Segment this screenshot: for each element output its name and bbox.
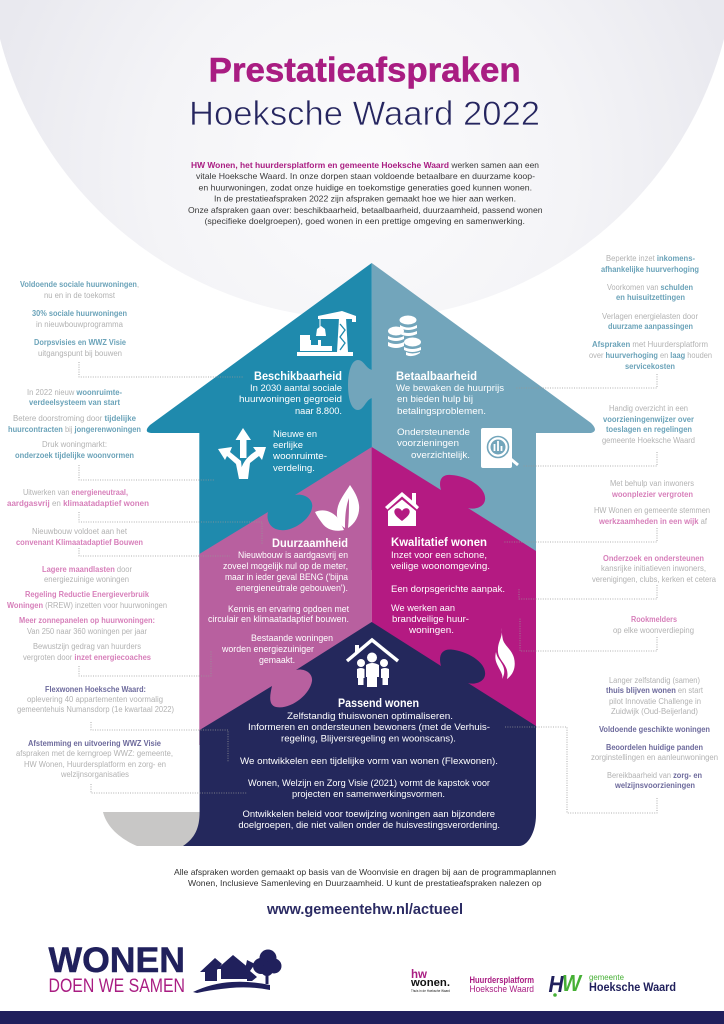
title: [189, 52, 540, 133]
side notes: woonruimteverdeling left: verdeelsysteem van start: [29, 398, 120, 407]
title: Prestatieafspraken: [209, 52, 521, 90]
side notes: beschikbaarheid left: 30% sociale huurwoningen: [32, 309, 127, 318]
panel: passend wonen background: [183, 622, 536, 846]
side notes: kwalitatief wonen right: HW Wonen en gemeente stemmen: [594, 506, 710, 515]
text block: beschikbaarheid: In 2030 aantal sociale: [250, 383, 342, 394]
text block: voorzieningen: Ondersteunende: [397, 427, 470, 438]
text block: beschikbaarheid: huurwoningen gegroeid: [239, 394, 342, 405]
logo: wonen doen we samen: DOEN WE SAMEN: [48, 976, 185, 997]
panel: beschikbaarheid background: [147, 263, 372, 570]
text block: kwalitatief wonen: Een dorpsgerichte aanpak.: [391, 584, 505, 595]
icon: diverging arrows: [218, 428, 266, 479]
logo: wonen doen we samen: [48, 941, 282, 997]
text block: beschikbaarheid: [239, 371, 342, 417]
side notes: woonruimteverdeling left: Druk woningmarkt:: [42, 440, 107, 449]
side notes: betaalbaarheid right: duurzame aanpassingen: [608, 322, 693, 331]
text block: duurzaamheid: [208, 538, 349, 666]
text block: passend wonen: doelgroepen, die niet vallen onder de huisvestingsverordening.: [238, 820, 500, 831]
side notes: duurzaamheid left: Nieuwbouw voldoet aan het: [32, 527, 128, 536]
side notes: duurzaamheid left: vergroten door inzet energiecoaches: [23, 653, 152, 662]
text block: duurzaamheid: maar in ieder geval BENG ('bijna: [225, 572, 349, 583]
panel: kwalitatief wonen background: [372, 447, 536, 745]
text block: kwalitatief wonen: [391, 537, 505, 636]
side notes: passend wonen left: Afstemming en uitvoering WWZ Visie: [28, 739, 162, 748]
icon: flame: [495, 628, 515, 679]
footer text: Alle afspraken worden gemaakt op basis van de Woonvisie en dragen bij aan de programmaplannen: [174, 867, 556, 877]
text block: beschikbaarheid: naar 8.800.: [295, 406, 342, 417]
side notes: woonruimteverdeling left: In 2022 nieuw woonruimte-: [27, 388, 122, 397]
website link: www.gemeentehw.nl/actueel: [266, 901, 463, 918]
side notes: betaalbaarheid right: Afspraken met Huurdersplatform: [592, 340, 708, 349]
intro text: Onze afspraken gaan over: beschikbaarheid, betaalbaarheid, duurzaamheid, passend wonen: [188, 205, 543, 215]
text block: duurzaamheid: worden energiezuiniger: [221, 644, 314, 655]
text block: woonruimteverdeling: eerlijke: [273, 440, 303, 451]
side notes: betaalbaarheid right: Verlagen energielasten door: [602, 312, 698, 321]
side notes: betaalbaarheid right: Handig overzicht in een: [609, 404, 688, 413]
logo: hw wonen: [410, 967, 450, 993]
text block: woonruimteverdeling: [272, 429, 327, 474]
side notes: passend wonen right: Beoordelen huidige panden: [606, 743, 703, 752]
logo: houses and tree: [193, 950, 282, 993]
side notes: passend wonen right: Langer zelfstandig (samen): [609, 676, 700, 685]
text block: passend wonen: Ontwikkelen beleid voor toewijzing woningen aan bijzondere: [242, 809, 495, 820]
text block: woonruimteverdeling: verdeling.: [273, 463, 315, 474]
text block: duurzaamheid: gemaakt.: [259, 655, 295, 666]
text block: kwalitatief wonen: woningen.: [408, 625, 454, 636]
logo: gemeente hoeksche waard: W: [562, 970, 583, 996]
side notes: beschikbaarheid left: [20, 280, 139, 358]
logo: gemeente hoeksche waard: [548, 970, 676, 997]
logo: gemeente hoeksche waard: gemeente: [589, 973, 625, 982]
intro text: In de prestatieafspraken 2022 zijn afspraken gemaakt hoe we hier aan werken.: [214, 194, 516, 204]
side notes: duurzaamheid left: Meer zonnepanelen op huurwoningen:: [19, 616, 155, 625]
side notes: duurzaamheid left: [7, 488, 167, 662]
side notes: duurzaamheid left: Van 250 naar 360 woningen per jaar: [27, 627, 147, 636]
side notes: duurzaamheid left: Bewustzijn gedrag van huurders: [33, 642, 141, 651]
text block: passend wonen: Passend wonen: [338, 698, 419, 710]
side notes: beschikbaarheid left: uitgangspunt bij bouwen: [38, 349, 122, 358]
text block: passend wonen: [238, 698, 500, 831]
side notes: duurzaamheid left: Uitwerken van energieneutraal,: [23, 488, 128, 497]
side notes: passend wonen left: [16, 685, 174, 779]
side notes: passend wonen right: thuis blijven wonen en start: [606, 686, 704, 695]
logo: wonen doen we samen: WONEN: [48, 941, 185, 980]
logo: huurdersplatform: Hoeksche Waard: [470, 984, 534, 994]
icon: report with magnifier: [481, 428, 518, 468]
text block: kwalitatief wonen: We werken aan: [391, 603, 455, 614]
side notes: passend wonen right: zorginstellingen en aanleunwoningen: [591, 753, 718, 762]
intro text: vitale Hoeksche Waard. In onze dorpen staan voldoende betaalbare en duurzame koop-: [196, 171, 535, 181]
side notes: passend wonen right: Bereikbaarheid van zorg- en: [607, 771, 702, 780]
text block: kwalitatief wonen: Inzet voor een schone,: [391, 550, 487, 561]
text block: duurzaamheid: circulair en klimaatadaptief bouwen.: [208, 614, 349, 625]
puzzle knob: betaalbaarheid into beschikbaarheid: [348, 360, 372, 410]
side notes: betaalbaarheid right: Beperkte inzet inkomens-: [606, 254, 695, 263]
text block: passend wonen: Zelfstandig thuiswonen optimaliseren.: [287, 711, 453, 722]
text block: betaalbaarheid: betalingsproblemen.: [397, 406, 486, 417]
logo: huurdersplatform: Huurdersplatform: [470, 975, 534, 985]
icon: crane: [297, 311, 356, 356]
text block: voorzieningen: overzichtelijk.: [411, 450, 470, 461]
text block: kwalitatief wonen: brandveilige huur-: [392, 614, 469, 625]
intro text: en huurwoningen, zodat onze huidige en toekomstige generaties goed kunnen wonen.: [198, 182, 532, 192]
side notes: betaalbaarheid right: [589, 254, 712, 445]
side notes: betaalbaarheid right: gemeente Hoeksche Waard: [602, 436, 695, 445]
side notes: kwalitatief wonen right: [592, 479, 717, 635]
text block: kwalitatief wonen: veilige woonomgeving.: [391, 561, 490, 572]
side notes: duurzaamheid left: Lagere maandlasten door: [42, 565, 132, 574]
side notes: passend wonen right: [591, 676, 718, 790]
logo: hw wonen: hw: [411, 967, 428, 981]
side notes: duurzaamheid left: energiezuinige woningen: [44, 575, 129, 584]
text block: passend wonen: projecten en samenwerkingsvormen.: [292, 789, 445, 800]
side notes: kwalitatief wonen right: Rookmelders: [631, 615, 677, 624]
side notes: beschikbaarheid left: Dorpsvisies en WWZ Visie: [34, 338, 127, 347]
text block: voorzieningen: [397, 427, 470, 461]
side notes: duurzaamheid left: convenant Klimaatadaptief Bouwen: [16, 538, 143, 547]
footer bar: [0, 1011, 724, 1024]
footer text: Wonen, Inclusieve Samenleving en Duurzaamheid. U kunt de prestatieafspraken nalezen op: [188, 878, 542, 888]
text block: woonruimteverdeling: woonruimte-: [272, 451, 327, 462]
text block: betaalbaarheid: [396, 371, 504, 417]
text block: passend wonen: Wonen, Welzijn en Zorg Visie (2021) vormt de kapstok voor: [248, 778, 490, 789]
side notes: kwalitatief wonen right: werkzaamheden in een wijk af: [598, 517, 708, 526]
icon: leaves: [315, 485, 359, 531]
side notes: kwalitatief wonen right: woonplezier vergroten: [611, 490, 693, 499]
side notes: woonruimteverdeling left: Betere doorstroming door tijdelijke: [13, 414, 137, 423]
panel: duurzaamheid background: [199, 447, 372, 745]
side notes: betaalbaarheid right: en huisuitzettingen: [616, 293, 685, 302]
text block: duurzaamheid: Nieuwbouw is aardgasvrij en: [238, 550, 348, 561]
text block: beschikbaarheid: Beschikbaarheid: [254, 371, 342, 383]
side notes: betaalbaarheid right: afhankelijke huurverhoging: [601, 265, 699, 274]
logo: huurdersplatform: [470, 975, 534, 994]
side notes: beschikbaarheid left: nu en in de toekomst: [44, 291, 116, 300]
footer text: [174, 867, 556, 888]
side notes: woonruimteverdeling left: huurcontracten bij jongerenwoningen: [8, 425, 141, 434]
shadow base: [103, 812, 205, 846]
text block: duurzaamheid: zoveel mogelijk nul op de meter,: [223, 561, 348, 572]
side notes: passend wonen right: Voldoende geschikte woningen: [599, 725, 710, 734]
side notes: passend wonen left: welzijnsorganisaties: [60, 770, 129, 779]
side notes: passend wonen right: welzijnsvoorzieningen: [614, 781, 695, 790]
logo: hw wonen: Thuis in de Hoeksche Waard: [411, 989, 450, 993]
side notes: kwalitatief wonen right: Onderzoek en ondersteunen: [603, 554, 704, 563]
logo: hw wonen: wonen.: [410, 977, 450, 989]
panel: house shape: [103, 263, 595, 846]
text block: voorzieningen: voorzieningen: [397, 438, 459, 449]
side notes: betaalbaarheid right: toeslagen en regelingen: [606, 425, 692, 434]
side notes: woonruimteverdeling left: onderzoek tijdelijke woonvormen: [15, 451, 134, 460]
panel: betaalbaarheid background: [372, 263, 595, 570]
intro text: [188, 160, 543, 226]
side notes: betaalbaarheid right: voorzieningenwijzer over: [603, 415, 694, 424]
side notes: betaalbaarheid right: servicekosten: [625, 362, 675, 371]
dotted connectors: [79, 362, 657, 813]
side notes: kwalitatief wonen right: verenigingen, clubs, kerken et cetera: [592, 575, 717, 584]
logo: gemeente hoeksche waard: Hoeksche Waard: [589, 982, 676, 994]
icon: coins: [388, 316, 421, 356]
side notes: duurzaamheid left: Regeling Reductie Energieverbruik: [25, 590, 150, 599]
icon: family under roof: [347, 640, 398, 687]
text block: kwalitatief wonen: Kwalitatief wonen: [391, 537, 487, 549]
side notes: betaalbaarheid right: Voorkomen van schulden: [607, 283, 693, 292]
side notes: beschikbaarheid left: Voldoende sociale huurwoningen,: [20, 280, 139, 289]
side notes: betaalbaarheid right: over huurverhoging en laag houden: [589, 351, 712, 360]
side notes: passend wonen left: HW Wonen, Huurdersplatform en zorg- en: [24, 760, 166, 769]
text block: passend wonen: Informeren en ondersteunen bewoners (met de Verhuis-: [248, 722, 490, 733]
side notes: passend wonen left: gemeentehuis Numansdorp (1e kwartaal 2022): [17, 705, 174, 714]
icon: house with heart: [385, 492, 419, 526]
text block: duurzaamheid: Kennis en ervaring opdoen met: [228, 604, 349, 615]
logo: gemeente hoeksche waard: H: [548, 971, 564, 997]
side notes: duurzaamheid left: Woningen (RREW) inzetten voor huurwoningen: [7, 601, 167, 610]
text block: woonruimteverdeling: Nieuwe en: [273, 429, 317, 440]
side notes: passend wonen left: Flexwonen Hoeksche Waard:: [45, 685, 146, 694]
intro text: HW Wonen, het huurdersplatform en gemeente Hoeksche Waard werken samen aan een: [191, 160, 539, 170]
side notes: passend wonen right: pilot Innovatie Challenge in: [609, 697, 701, 706]
side notes: beschikbaarheid left: in nieuwbouwprogramma: [36, 320, 124, 329]
text block: betaalbaarheid: en bieden hulp bij: [397, 394, 473, 405]
text block: duurzaamheid: Duurzaamheid: [272, 538, 348, 550]
text block: passend wonen: regeling, Blijversregeling en woonscans).: [281, 734, 456, 745]
text block: passend wonen: We ontwikkelen een tijdelijke vorm van wonen (Flexwonen).: [240, 756, 498, 767]
side notes: passend wonen left: oplevering 40 appartementen voormalig: [27, 695, 163, 704]
background circle: [0, 0, 724, 319]
side notes: duurzaamheid left: aardgasvrij en klimaatadaptief wonen: [7, 499, 149, 508]
side notes: kwalitatief wonen right: kansrijke initiatieven inwoners,: [601, 564, 706, 573]
intro text: (specifieke doelgroepen), goed wonen in een prettige omgeving en samenwerking.: [204, 216, 525, 226]
side notes: kwalitatief wonen right: op elke woonverdieping: [613, 626, 694, 635]
text block: betaalbaarheid: We bewaken de huurprijs: [396, 383, 504, 394]
side notes: woonruimteverdeling left: [8, 388, 141, 460]
side notes: passend wonen left: afspraken met de kerngroep WWZ: gemeente,: [16, 749, 173, 758]
text block: betaalbaarheid: Betaalbaarheid: [396, 371, 477, 383]
text block: duurzaamheid: energieneutrale gebouwen').: [236, 583, 348, 594]
text block: duurzaamheid: Bestaande woningen: [251, 633, 333, 644]
title: Hoeksche Waard 2022: [189, 95, 540, 133]
side notes: passend wonen right: Zuidwijk (Oud-Beijerland): [611, 707, 698, 716]
side notes: kwalitatief wonen right: Met behulp van inwoners: [610, 479, 694, 488]
